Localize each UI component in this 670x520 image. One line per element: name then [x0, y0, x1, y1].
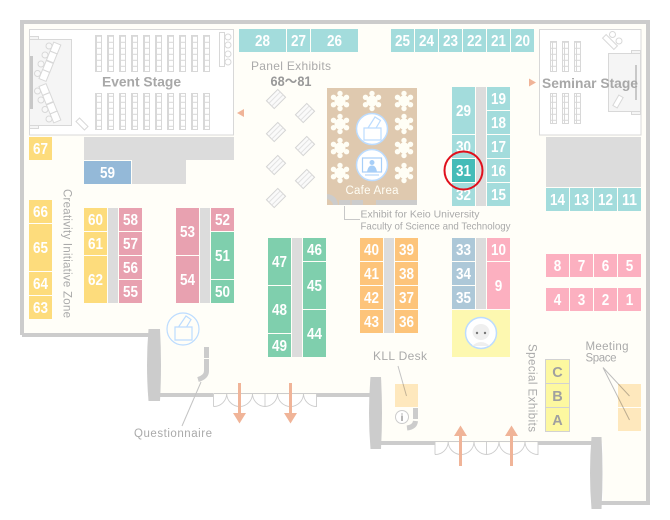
leaders: meeting space [603, 368, 630, 420]
special exhibits booths A B C: A [552, 413, 563, 429]
booths 4-1: 2 [602, 292, 609, 309]
leader: keio exhibit [344, 206, 360, 220]
info counter [407, 408, 416, 428]
label: meeting space: Meeting [586, 341, 628, 353]
icon: questionnaire ballot box [167, 313, 199, 345]
arrow: exit [233, 383, 246, 424]
booth 67 [29, 137, 52, 160]
booths 29-32 and 19-15: 18 [491, 115, 506, 132]
seating [550, 42, 580, 124]
arrow: left to event stage [237, 109, 244, 117]
meeting space booths [618, 384, 641, 431]
booths 40-43 and 39-36: 42 [364, 290, 379, 307]
booths 40-43 and 39-36: 36 [399, 314, 414, 331]
booths 8-5: 7 [578, 258, 585, 275]
booths 8-5: 5 [626, 258, 634, 275]
special exhibits booths A B C [546, 360, 570, 432]
label: keio university exhibit: Exhibit for Keio University [360, 209, 480, 221]
booths 29-32 and 19-15: 32 [456, 187, 471, 204]
booths 40-43 and 39-36: 43 [364, 314, 379, 331]
booths 47-49 and 46-44: 45 [307, 278, 322, 295]
booths 60-62: 60 [88, 212, 103, 229]
booths 10, 9: 9 [495, 278, 503, 295]
leader: kll desk [398, 366, 406, 396]
booth 67: 67 [33, 141, 48, 158]
icon: information [396, 410, 408, 424]
booths 60-62: 61 [88, 236, 103, 253]
arrow: entrance [454, 426, 467, 466]
booths 10, 9 [487, 238, 510, 309]
booths 4-1 [546, 288, 641, 311]
stage platform [608, 50, 640, 114]
label: keio university exhibit: Faculty of Science and Technology [360, 221, 511, 233]
booths 33-35: 33 [456, 242, 471, 259]
booths 51, 50: 50 [215, 284, 230, 301]
booths 33-35 [452, 238, 486, 309]
booths 47-49 and 46-44 [268, 238, 326, 357]
arrow: entrance [505, 426, 518, 466]
stage platform [30, 36, 72, 128]
booth 59 [84, 161, 131, 184]
cafe tables [331, 91, 413, 183]
booths 8-5: 8 [554, 258, 562, 275]
booths 14-11 [546, 188, 641, 211]
icon: presentation screen [356, 150, 388, 180]
booths 40-43 and 39-36: 39 [399, 242, 414, 259]
booths 47-49 and 46-44: 48 [272, 302, 287, 319]
kll desk booth [395, 384, 418, 407]
booths 4-1: 3 [578, 292, 586, 309]
booths 33-35: 34 [456, 266, 471, 283]
red circle marker [444, 152, 482, 190]
label: questionnaire: Questionnaire [134, 428, 212, 440]
booths 8-5 [546, 254, 641, 277]
booths 60-62: 62 [88, 272, 103, 289]
entrance doors right [435, 442, 538, 455]
booths 29-32 and 19-15: 15 [491, 187, 506, 204]
booths 40-43 and 39-36 [360, 238, 418, 333]
label: meeting space [586, 341, 628, 364]
grey blocks [84, 137, 641, 187]
booths 14-11: 13 [574, 192, 589, 209]
booths 25-20: 20 [515, 33, 530, 50]
icon: ballot box [356, 114, 388, 144]
booths 53, 54, 52: 53 [180, 224, 195, 241]
heading: event stage: Event Stage [102, 74, 181, 90]
arrow: exit [284, 383, 297, 424]
panel exhibits heading: Panel Exhibits [251, 59, 331, 73]
booths 66-63: 64 [33, 276, 48, 293]
booths 25-20: 22 [467, 33, 482, 50]
panel exhibits stands [266, 89, 315, 208]
booths 66-63: 65 [33, 240, 48, 257]
booths 58-55: 56 [123, 260, 138, 277]
panel: cafe area [327, 88, 417, 205]
panel exhibits heading: 68～81 [270, 74, 312, 89]
label: creativity initiative zone: Creativity Initiative Zone [60, 189, 72, 318]
label: cafe area: Cafe Area [346, 185, 399, 197]
booths 14-11: 11 [622, 192, 637, 209]
highlighted booth 31 [452, 159, 475, 182]
booths 60-62 [84, 208, 118, 303]
booths 53, 54, 52: 52 [215, 212, 230, 229]
booths 53, 54, 52: 54 [180, 272, 195, 289]
arrow: right to seminar stage [529, 78, 536, 86]
booths 29-32 and 19-15: 17 [491, 139, 506, 156]
booths 14-11: 12 [598, 192, 613, 209]
booths 51, 50: 51 [215, 248, 230, 265]
special exhibits booths A B C: B [552, 389, 563, 405]
exhibit counters [327, 194, 417, 205]
label: meeting space: Space [586, 352, 616, 364]
booths 58-55: 57 [123, 236, 138, 253]
booths 29-32 and 19-15 [452, 87, 510, 206]
booths 58-55: 58 [123, 212, 138, 229]
booths 29-32 and 19-15: 16 [491, 163, 506, 180]
audience seating [96, 32, 231, 130]
booths 40-43 and 39-36: 37 [399, 290, 414, 307]
booths 58-55: 55 [123, 284, 138, 301]
booths 25-20 [391, 29, 534, 52]
leader: questionnaire [182, 382, 201, 426]
highlighted booth 31: 31 [456, 163, 471, 180]
booths 53, 54, 52 [176, 208, 234, 303]
panel: event stage [30, 30, 234, 135]
booths 47-49 and 46-44: 47 [272, 254, 287, 271]
booths 4-1: 4 [554, 292, 562, 309]
booths 28-26: 27 [291, 33, 306, 50]
booths 58-55 [119, 208, 142, 303]
booths 47-49 and 46-44: 49 [272, 338, 287, 355]
questionnaire stand [198, 347, 210, 380]
label: kll desk: KLL Desk [373, 349, 428, 363]
panel exhibits heading [251, 59, 331, 89]
label: keio university exhibit [360, 209, 511, 233]
booths 40-43 and 39-36: 38 [399, 266, 414, 283]
booths 40-43 and 39-36: 40 [364, 242, 379, 259]
booths 29-32 and 19-15: 30 [456, 139, 471, 156]
booths 47-49 and 46-44: 44 [307, 326, 322, 343]
panel: seminar stage [540, 30, 641, 135]
robot exhibit [452, 310, 510, 357]
booths 29-32 and 19-15: 19 [491, 91, 506, 108]
booths 25-20: 24 [419, 33, 434, 50]
booths 47-49 and 46-44: 46 [307, 242, 322, 259]
booths 8-5: 6 [602, 258, 610, 275]
special exhibits booths A B C: C [552, 365, 563, 381]
booth 59: 59 [100, 165, 115, 182]
icon: information: i [401, 413, 404, 424]
label: special exhibits: Special Exhibits [526, 344, 538, 432]
booths 66-63 [29, 200, 52, 319]
exit doors left [214, 394, 317, 407]
booths 33-35: 35 [456, 290, 471, 307]
booths 4-1: 1 [626, 292, 634, 309]
booths 28-26: 26 [327, 33, 342, 50]
booths 25-20: 21 [491, 33, 506, 50]
booths 29-32 and 19-15: 29 [456, 103, 471, 120]
booths 28-26 [239, 29, 358, 52]
booths 66-63: 63 [33, 300, 48, 317]
booths 66-63: 66 [33, 204, 48, 221]
booths 25-20: 25 [395, 33, 410, 50]
booths 25-20: 23 [443, 33, 458, 50]
booths 28-26: 28 [255, 33, 270, 50]
booths 14-11: 14 [550, 192, 565, 209]
heading: seminar stage: Seminar Stage [542, 75, 638, 91]
booths 51, 50 [211, 232, 234, 303]
booths 10, 9: 10 [491, 242, 506, 259]
booths 40-43 and 39-36: 41 [364, 266, 379, 283]
